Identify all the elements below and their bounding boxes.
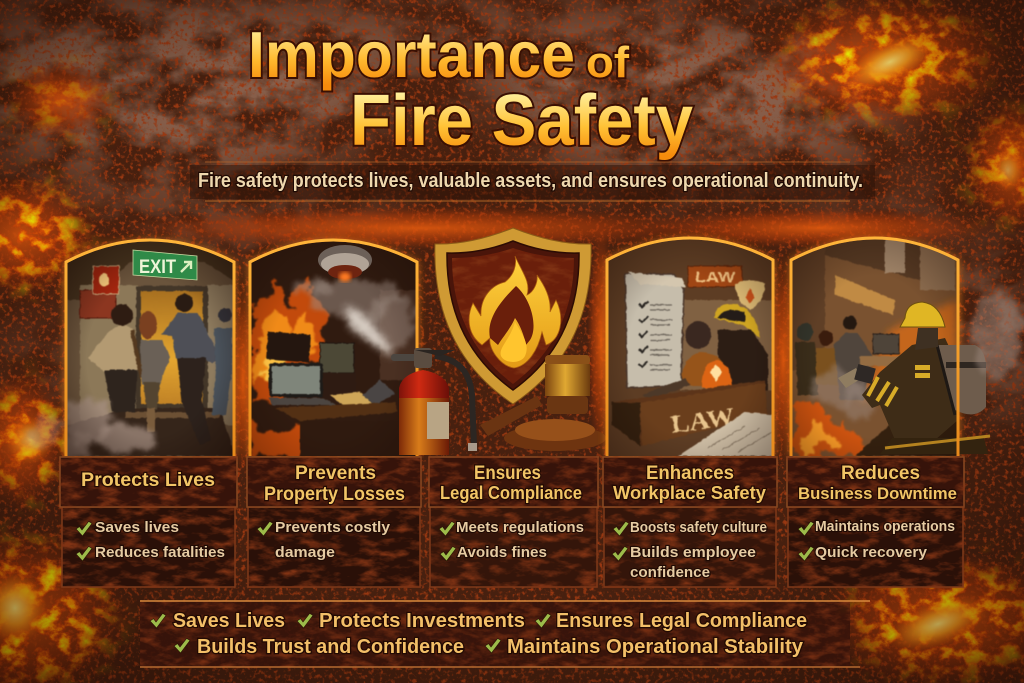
title: Importance	[248, 18, 575, 91]
subtitle band	[190, 162, 875, 201]
banner line two: Maintains Operational Stability	[507, 636, 804, 658]
card illustration: law and compliance checklist: LAW	[695, 269, 736, 286]
spray	[345, 305, 392, 357]
heading: enhances workplace safety	[613, 463, 766, 503]
title: of	[586, 38, 629, 87]
badge	[735, 280, 765, 310]
panel: ensures legal compliance: Avoids fines	[457, 544, 547, 561]
center emblem: shield with flame	[435, 228, 591, 404]
panel: reduces business downtime	[787, 457, 964, 587]
bottom banner	[140, 601, 870, 667]
heading: ensures legal compliance: Ensures	[474, 463, 541, 484]
banner line one	[150, 610, 807, 632]
paper	[678, 412, 775, 456]
firefighter gear	[718, 330, 768, 390]
person left	[88, 304, 142, 412]
heading: ensures legal compliance: Legal Compliance	[440, 483, 582, 503]
heading: prevents property losses	[264, 463, 405, 505]
panel: prevents property losses	[247, 457, 421, 587]
monitors	[266, 332, 311, 363]
smoke	[68, 396, 159, 456]
book	[612, 380, 767, 446]
panel: protects lives	[60, 457, 237, 587]
smoke detector	[318, 245, 372, 282]
banner line one: Protects Investments	[319, 610, 525, 632]
panel: ensures legal compliance: Meets regulations	[456, 519, 584, 536]
laptop	[269, 363, 323, 397]
notebook	[330, 390, 372, 406]
fire and smoke	[792, 402, 875, 456]
person man	[160, 292, 216, 420]
desk	[275, 402, 398, 421]
smoke right of card five	[29, 293, 1024, 448]
card illustration: law and compliance checklist: LAW	[669, 403, 736, 439]
subtitle band: Fire safety protects lives, valuable assets, and ensures operational continuity.	[198, 170, 863, 192]
law plaque	[688, 266, 742, 287]
fire	[252, 275, 330, 456]
card illustration: firefighter keeping operations running	[785, 230, 990, 460]
panel: enhances workplace safety: confidence	[630, 564, 710, 581]
fire extinguisher	[391, 348, 477, 455]
title	[248, 18, 693, 161]
heading: ensures legal compliance	[440, 463, 582, 503]
door	[136, 286, 208, 408]
panel: reduces business downtime: Quick recovery	[815, 544, 928, 561]
flame	[469, 256, 561, 368]
heading: reduces business downtime: Reduces	[841, 463, 920, 484]
heading: reduces business downtime	[798, 463, 957, 503]
panel: prevents property losses: damage	[275, 544, 335, 561]
banner line two	[174, 636, 804, 658]
panel: protects lives: Reduces fatalities	[95, 544, 225, 561]
firefighter	[838, 302, 990, 454]
panel: ensures legal compliance	[429, 457, 598, 587]
panel: protects lives: Saves lives	[95, 519, 179, 536]
title: Fire Safety	[350, 81, 693, 161]
heading: enhances workplace safety: Workplace Safety	[613, 483, 766, 503]
card illustration: law and compliance checklist	[600, 230, 780, 460]
banner line two: Builds Trust and Confidence	[197, 636, 464, 658]
banner line one: Ensures Legal Compliance	[556, 610, 807, 632]
exit sign: EXIT	[139, 257, 176, 278]
card illustration: alarm, fire and sprayed office	[245, 235, 420, 461]
person right	[212, 308, 232, 415]
panel: enhances workplace safety	[603, 457, 777, 587]
gavel and sound block	[480, 355, 606, 451]
smoke	[290, 278, 416, 350]
background people	[795, 316, 872, 400]
banner line one: Saves Lives	[173, 610, 285, 632]
exit sign	[133, 250, 197, 280]
heading: protects lives: Protects Lives	[81, 470, 215, 491]
heading: prevents property losses: Property Losses	[264, 484, 405, 505]
panel: reduces business downtime: Maintains operations	[815, 518, 955, 535]
checklist	[625, 274, 684, 388]
card illustration: evacuation through exit	[57, 235, 240, 460]
alarm panel	[80, 290, 116, 318]
heading: enhances workplace safety: Enhances	[646, 463, 734, 484]
heading: prevents property losses: Prevents	[295, 463, 376, 484]
person girl	[139, 311, 170, 432]
panel: prevents property losses: Prevents costly	[275, 519, 391, 536]
heading: reduces business downtime: Business Downtime	[798, 484, 957, 503]
panel: enhances workplace safety: Builds employee	[630, 544, 756, 561]
panel: enhances workplace safety: Boosts safety culture	[630, 519, 767, 536]
